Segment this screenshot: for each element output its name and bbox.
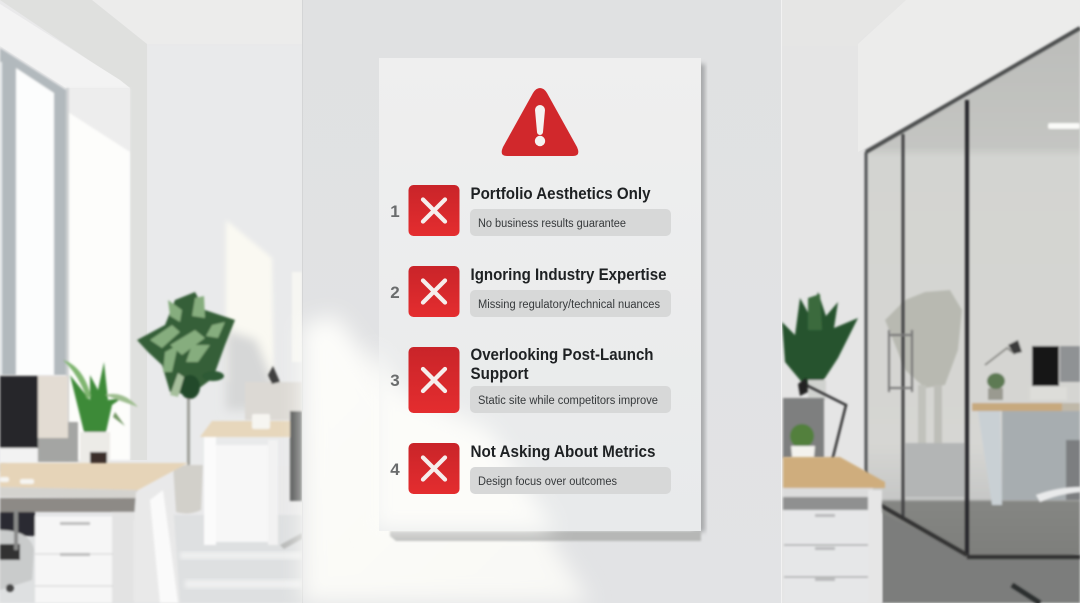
left office scene — [0, 0, 302, 603]
dark fern plant — [782, 292, 858, 400]
icon: warning triangle — [502, 88, 578, 156]
board shadow — [693, 64, 705, 532]
item 2 — [390, 266, 671, 317]
heading 3: Overlooking Post-Launch — [470, 346, 654, 364]
right office scene — [782, 0, 1080, 603]
description pill 2: Missing regulatory/technical nuances — [478, 299, 660, 311]
item 4 — [390, 443, 671, 494]
front desk — [0, 463, 188, 603]
window soffit — [0, 4, 130, 88]
grey divider, desk lamp and pot — [783, 378, 847, 471]
number 1: 1 — [390, 202, 400, 221]
back desk — [200, 366, 302, 549]
heading 1: Portfolio Aesthetics Only — [470, 185, 651, 203]
description pill 1 — [470, 209, 671, 236]
reflected tree — [885, 290, 962, 388]
front monitor and chair — [0, 376, 78, 472]
description pill 3 — [470, 386, 671, 413]
back wall — [148, 46, 302, 466]
wall sunlight — [302, 315, 590, 603]
number 4: 4 — [390, 460, 400, 479]
item 1 — [390, 185, 671, 236]
item 3 — [390, 346, 671, 413]
heading 3 second line: Support — [470, 365, 529, 383]
icon: red x box 4 — [408, 443, 460, 494]
ceiling light — [1048, 123, 1080, 129]
description pill 4 — [470, 467, 671, 494]
back desk through glass — [1002, 408, 1080, 500]
window and reveal — [0, 48, 130, 460]
description pill 4: Design focus over outcomes — [478, 476, 617, 488]
board face — [379, 58, 701, 531]
number 2: 2 — [390, 283, 400, 302]
icon: red x box 3 — [408, 347, 460, 413]
description pill 1: No business results guarantee — [478, 218, 626, 230]
glass partition — [866, 28, 1080, 555]
description pill 2 — [470, 290, 671, 317]
ceiling — [92, 0, 302, 44]
tree plant — [137, 292, 235, 514]
floor — [866, 495, 1080, 603]
floor — [0, 515, 302, 603]
ceiling — [782, 0, 906, 46]
central wall — [302, 0, 782, 603]
icon: exclamation mark — [535, 105, 545, 146]
number 3: 3 — [390, 371, 400, 390]
small green plant — [63, 360, 138, 477]
icon: red x box 1 — [408, 185, 460, 236]
description pill 3: Static site while competitors improve — [478, 395, 658, 407]
left wall soffit — [0, 0, 147, 460]
icon: red x box 2 — [408, 266, 460, 317]
glass frames — [866, 28, 1080, 603]
heading 2: Ignoring Industry Expertise — [470, 266, 666, 284]
warning board — [372, 58, 705, 541]
heading 4: Not Asking About Metrics — [470, 443, 656, 461]
right desk and drawers — [783, 457, 885, 603]
upper wall panel — [858, 0, 1080, 152]
plant shadow on wall — [226, 330, 276, 410]
sunlight patch on back wall — [226, 220, 274, 400]
